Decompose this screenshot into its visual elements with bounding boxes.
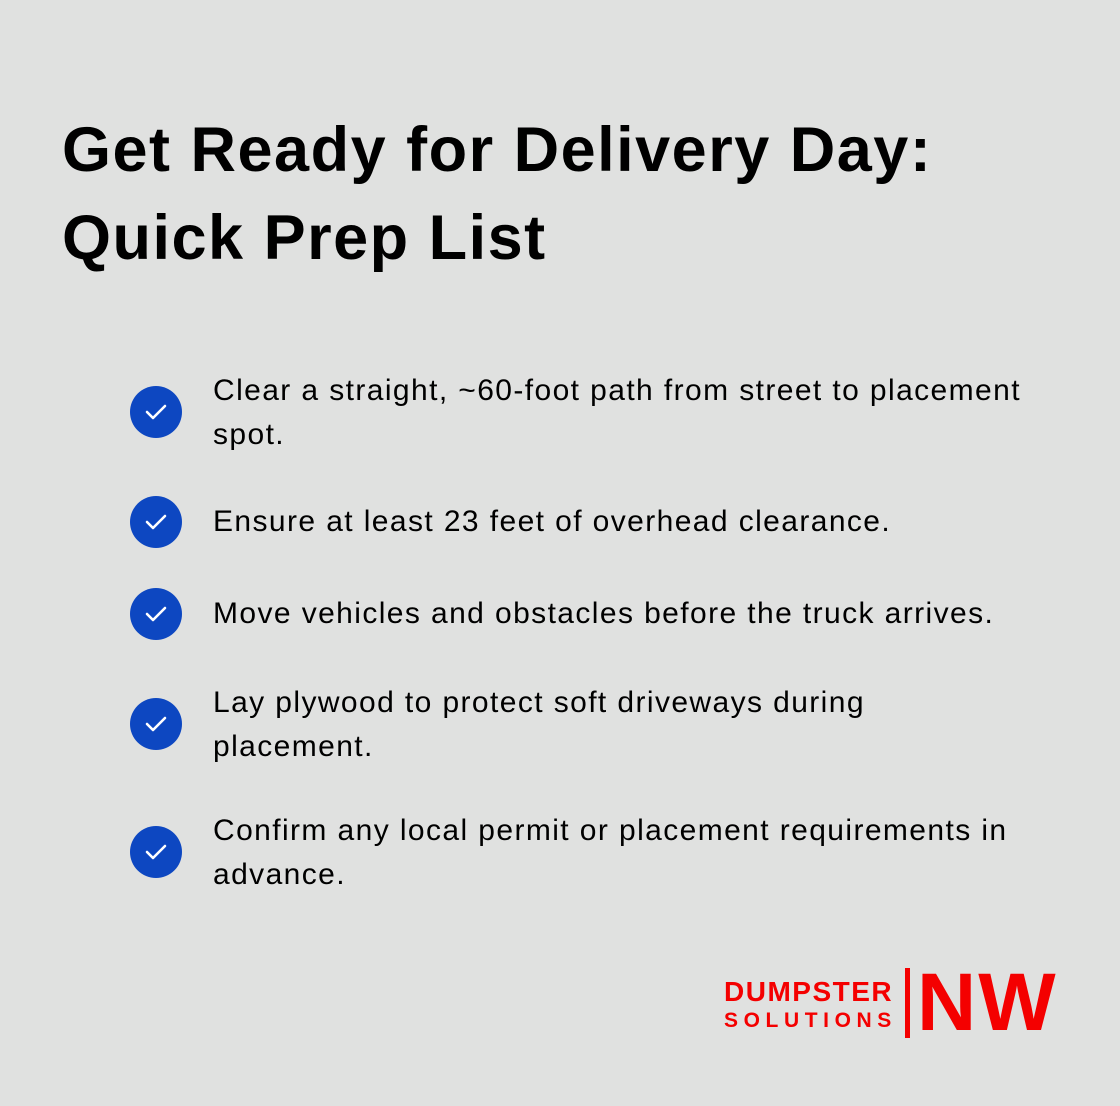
item 4 [130,686,865,763]
item 3 [130,588,994,640]
text [213,814,1008,891]
text [213,686,865,763]
title: Get Ready for Delivery Day: [62,115,932,185]
icon: check [130,496,182,548]
text: Ensure at least 23 feet of overhead clearance. [213,505,891,538]
icon: check [130,386,182,438]
icon: check [130,826,182,878]
text: Move vehicles and obstacles before the truck arrives. [213,597,994,630]
text: Clear a straight, ~60-foot path from street to placement [213,374,1021,407]
logo: DUMPSTER [724,976,893,1007]
logo [724,957,1058,1048]
icon: check [130,698,182,750]
item 1 [130,374,1021,451]
title [62,115,932,273]
icon: check [130,588,182,640]
text: Lay plywood to protect soft driveways during [213,686,865,719]
text [213,374,1021,451]
item 2 [130,496,891,548]
title: Quick Prep List [62,203,547,273]
logo: NW [917,957,1058,1048]
item 5 [130,814,1008,891]
text: spot. [213,418,285,451]
text: Confirm any local permit or placement requirements in [213,814,1008,847]
text: placement. [213,730,374,763]
logo: SOLUTIONS [724,1009,897,1032]
text: advance. [213,858,346,891]
